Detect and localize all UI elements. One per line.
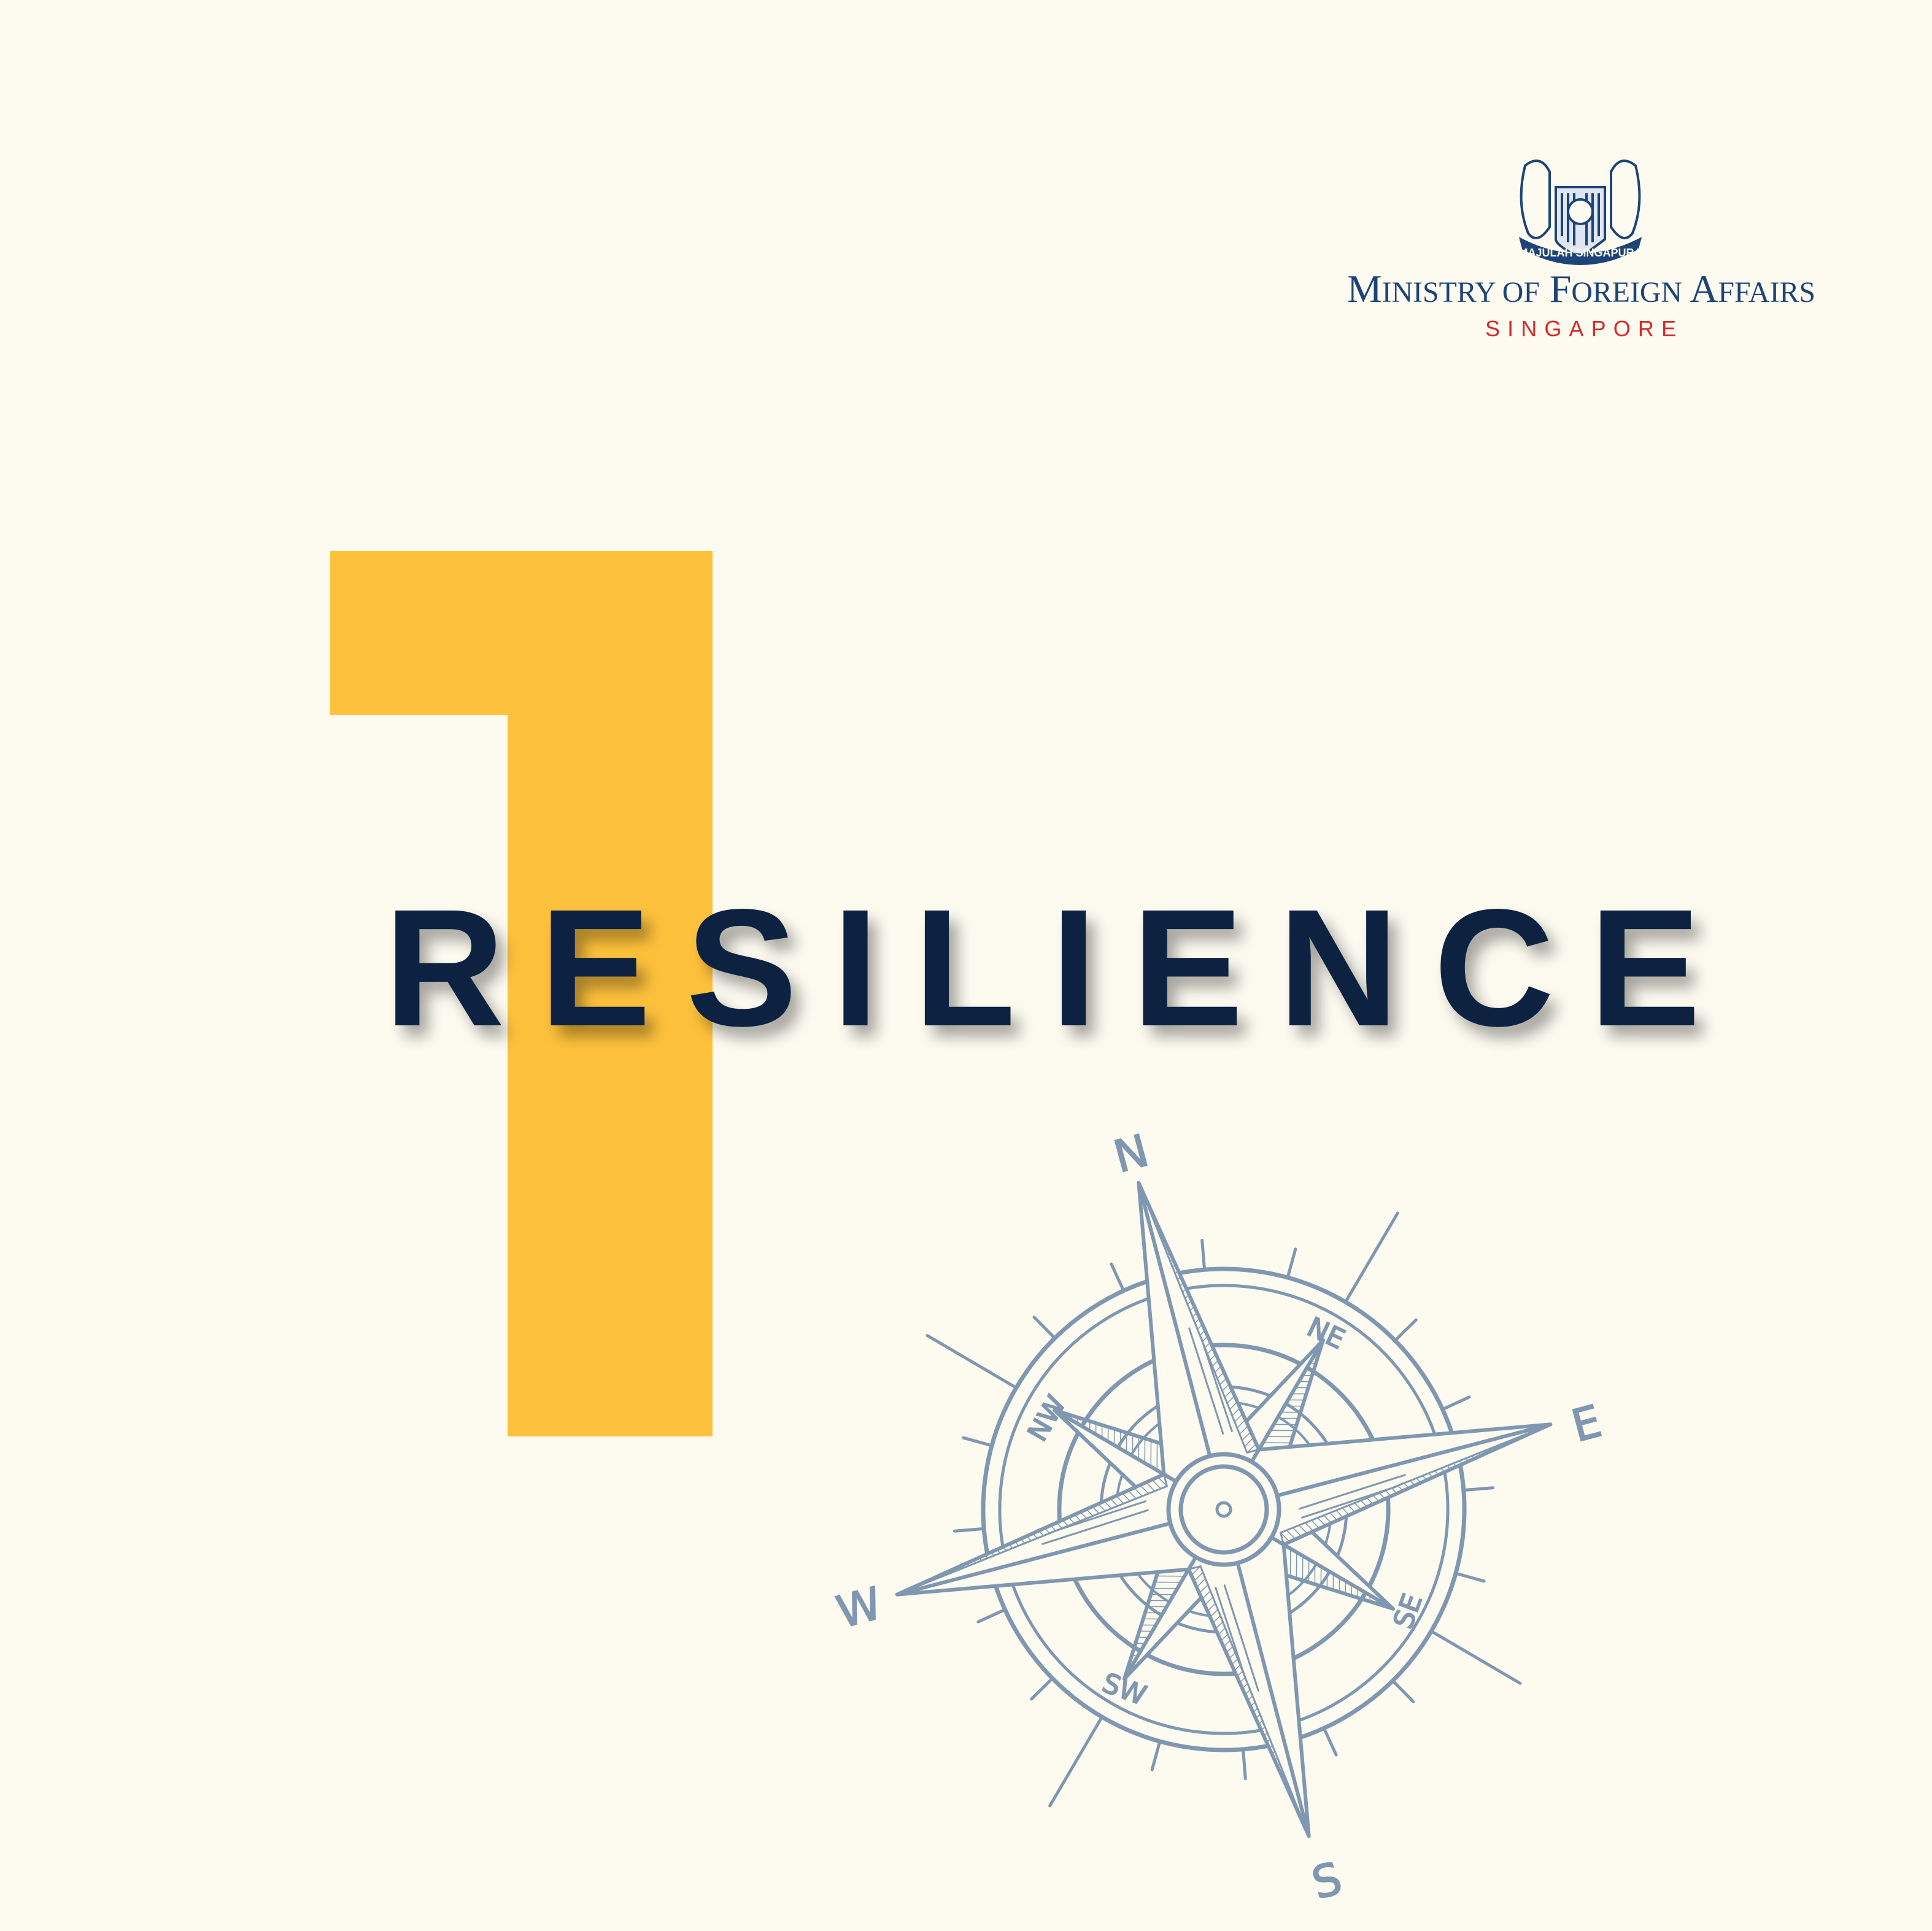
compass labels: NW: [1022, 1390, 1072, 1447]
compass labels: S: [1307, 1852, 1347, 1909]
compass labels: E: [1566, 1395, 1607, 1452]
icon: coat of arms: [1518, 161, 1642, 264]
rings: [899, 1185, 1548, 1834]
compass labels: SW: [1099, 1667, 1150, 1711]
compass labels: NE: [1302, 1311, 1350, 1355]
logo: MFA Singapore: [1347, 161, 1815, 341]
cardinal points: [812, 1098, 1636, 1921]
text: SINGAPORE: SINGAPORE: [1485, 316, 1676, 341]
compass labels: [832, 1124, 1607, 1909]
compass rose: [812, 1098, 1636, 1921]
title: RESILIENCE: RESILIENCE: [384, 874, 1701, 1061]
center hub: [1156, 1442, 1291, 1577]
intercardinal points: [1022, 1308, 1425, 1711]
compass labels: N: [1108, 1124, 1154, 1183]
icon: coat of arms: MAJULAH SINGAPURA: [1518, 247, 1642, 259]
yellow number 1: [330, 551, 713, 1436]
text: ministry name: MINISTRY OF FOREIGN AFFAIRS: [1347, 267, 1815, 310]
compass labels: SE: [1388, 1590, 1429, 1633]
compass labels: W: [832, 1577, 887, 1638]
